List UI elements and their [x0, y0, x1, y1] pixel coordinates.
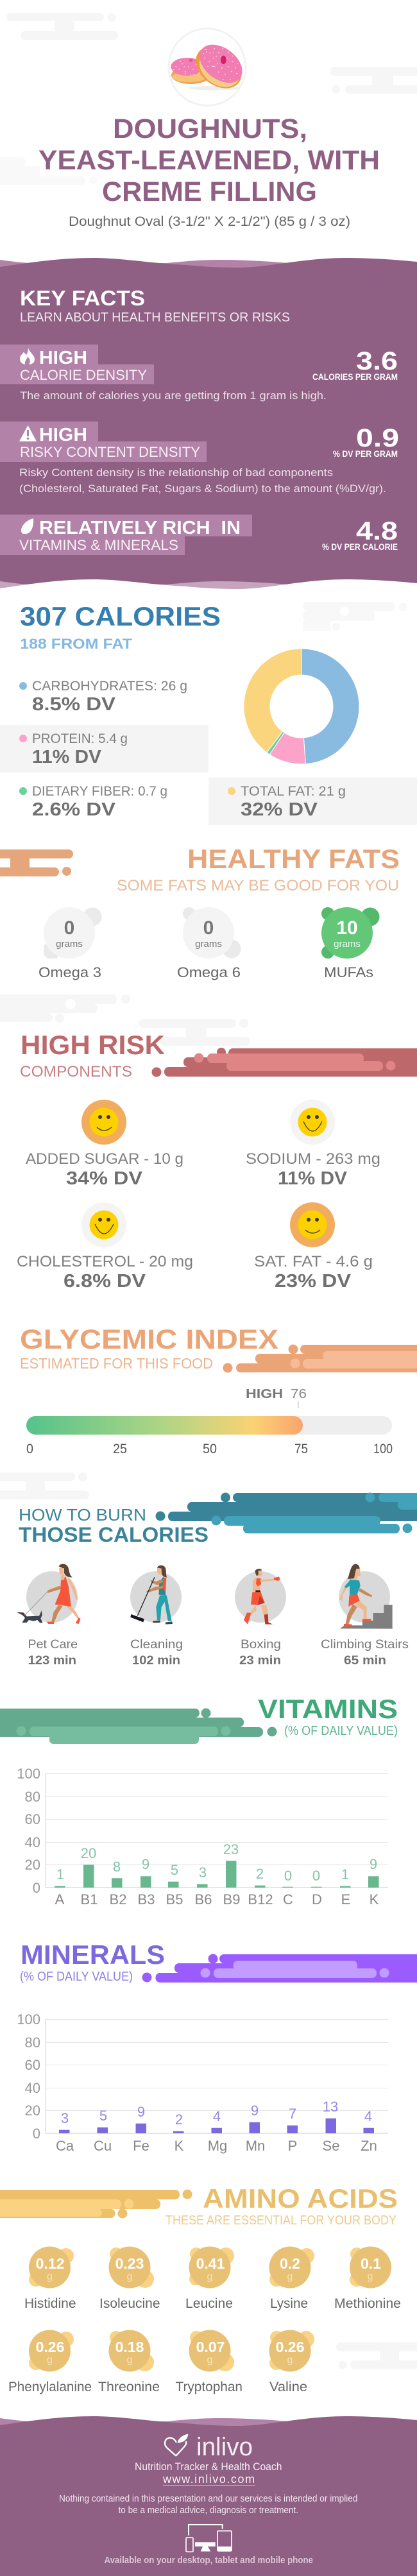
amino: leucine: g: [207, 2271, 212, 2282]
bar chart: vitamins: 9: [370, 1856, 377, 1872]
legend: total fat: 32% DV: [241, 799, 318, 820]
section brush: [0, 849, 73, 876]
risk: cholesterol: 6.8% DV: [64, 1271, 146, 1292]
website link: www.inlivo.com: [162, 2473, 255, 2486]
legend: dietary fiber: 2.6% DV: [32, 799, 116, 820]
section brush: [142, 1954, 417, 1983]
fat: mufas: MUFAs: [324, 964, 373, 980]
title: DOUGHNUTS,: [113, 114, 307, 144]
amino: tryptophan: 0.07: [196, 2339, 225, 2355]
amino: isoleucine: [99, 2247, 160, 2311]
bar chart: vitamins: 1: [341, 1866, 349, 1882]
section brush: [223, 1345, 417, 1373]
panel: healthy fats: [0, 844, 400, 980]
bar chart: vitamins: 60: [25, 1811, 40, 1827]
bar chart: vitamins: 0: [312, 1868, 320, 1884]
bar chart: minerals: 2: [175, 2111, 183, 2128]
amino: valine: 0.26: [276, 2339, 304, 2355]
icon: warning triangle: [19, 425, 37, 441]
heading: key facts: KEY FACTS: [20, 286, 145, 310]
amino: threonine: 0.18: [115, 2339, 144, 2355]
panel: calories: [0, 601, 417, 825]
amino: lysine: Lysine: [270, 2296, 308, 2311]
section brush: [0, 1708, 277, 1744]
risk: sodium: SODIUM - 263 mg: [246, 1150, 380, 1168]
gauge scale: 0: [26, 1442, 33, 1456]
amino: leucine: Leucine: [185, 2296, 233, 2311]
amino: phenylalanine: 0.26: [36, 2339, 64, 2355]
tagline: Nutrition Tracker & Health Coach: [135, 2461, 282, 2473]
bar chart: minerals: 40: [25, 2080, 40, 2096]
bar chart: minerals: 9: [137, 2104, 145, 2120]
panel: footer: [0, 2416, 417, 2576]
bar chart: minerals: Mg: [208, 2138, 227, 2154]
bar chart: vitamins: A: [55, 1891, 65, 1907]
amino: phenylalanine: [8, 2330, 92, 2394]
bar chart: vitamins: 8: [113, 1859, 121, 1875]
gauge scale: [26, 1442, 393, 1456]
heading: healthy fats: HEALTHY FATS: [187, 844, 400, 874]
legend: total fat: [228, 784, 346, 820]
fat: omega 3: Omega 3: [38, 964, 101, 980]
bar chart: vitamins: B5: [166, 1891, 183, 1907]
heading: high risk: HIGH RISK: [21, 1030, 165, 1060]
bar chart: minerals: Ca: [56, 2138, 74, 2154]
activity: climbing stairs: Climbing Stairs: [321, 1638, 409, 1651]
bar chart: minerals: K: [174, 2138, 184, 2154]
fat: omega 6: 0: [203, 917, 214, 939]
amino: tryptophan: Tryptophan: [176, 2380, 243, 2394]
fact: risky content density: RISKY CONTENT DENSITY: [20, 444, 200, 460]
bar chart: vitamins: 0: [284, 1868, 292, 1884]
bar chart: minerals: 4: [213, 2108, 221, 2124]
fact: calorie density: 3.6: [356, 347, 398, 375]
amino: threonine: g: [127, 2355, 132, 2366]
fat: omega 3: grams: [56, 939, 83, 950]
amino: methionine: Methionine: [334, 2296, 401, 2311]
bar chart: vitamins: D: [312, 1891, 322, 1907]
bar chart: vitamins: B1: [81, 1891, 98, 1907]
bar chart: minerals: 20: [25, 2103, 40, 2119]
fact: relatively rich in vitamins and minerals: 4.8: [356, 517, 398, 545]
risk: cholesterol: CHOLESTEROL - 20 mg: [17, 1253, 193, 1270]
bar chart: vitamins: 2: [256, 1866, 264, 1882]
key facts subheading: LEARN ABOUT HEALTH BENEFITS OR RISKS: [20, 311, 290, 325]
amino: methionine: g: [368, 2271, 373, 2282]
legend: dietary fiber: DIETARY FIBER: 0.7 g: [32, 784, 167, 799]
bar chart: minerals: 4: [364, 2108, 372, 2124]
amino: isoleucine: Isoleucine: [99, 2296, 160, 2311]
legend: dietary fiber: [19, 784, 167, 820]
amino: histidine: [24, 2247, 76, 2311]
bar chart: vitamins: 9: [142, 1856, 149, 1872]
bar chart: minerals: 9: [251, 2103, 259, 2119]
bar chart: vitamins: 80: [25, 1789, 40, 1805]
activity: pet care: 123 min: [28, 1654, 76, 1668]
amino: histidine: g: [47, 2271, 53, 2282]
bar chart: vitamins: K: [370, 1891, 379, 1907]
heading: vitamins: VITAMINS: [258, 1694, 398, 1724]
glycemic value label: [246, 1387, 307, 1408]
amino: histidine: 0.12: [36, 2255, 64, 2272]
glycemic subheading: ESTIMATED FOR THIS FOOD: [20, 1355, 213, 1372]
amino: tryptophan: [176, 2330, 243, 2394]
bar chart: vitamins: B12: [248, 1891, 273, 1907]
glycemic gauge bar: [26, 1416, 392, 1435]
icon: flame: [20, 348, 35, 364]
donut chart: [244, 649, 359, 764]
risk: saturated fat: [254, 1202, 373, 1292]
bar chart: vitamins: B9: [223, 1891, 240, 1907]
fact: risky content density: (Cholesterol, Saturated Fat, Sugars & Sodium) to the amount (%DV/gr).: [19, 482, 386, 495]
amino: valine: [269, 2330, 314, 2394]
calories from fat: 188 FROM FAT: [20, 636, 133, 652]
amino: methionine: 0.1: [361, 2255, 381, 2272]
risk: cholesterol: [17, 1202, 193, 1292]
fat: mufas: [321, 907, 380, 980]
bar chart: vitamins: 20: [81, 1845, 96, 1861]
amino: lysine: [269, 2247, 314, 2311]
gauge scale: 100: [373, 1442, 393, 1456]
title: [38, 114, 380, 207]
bar chart: minerals: 7: [289, 2106, 296, 2122]
bar chart: vitamins: B2: [110, 1891, 126, 1907]
fat: mufas: grams: [334, 939, 361, 950]
fact: relatively rich in vitamins and minerals: [0, 515, 398, 555]
amino: lysine: 0.2: [280, 2255, 300, 2272]
fat: omega 6: [177, 907, 241, 980]
amino: tryptophan: g: [207, 2355, 212, 2366]
bar chart: vitamins: 0: [33, 1880, 40, 1896]
gauge scale: 75: [294, 1442, 308, 1456]
activity: boxing: [235, 1569, 286, 1668]
bar chart: minerals: 13: [323, 2099, 338, 2115]
fact: risky content density: % DV PER GRAM: [333, 449, 398, 459]
amino: valine: g: [287, 2355, 293, 2366]
fact: relatively rich in vitamins and minerals: VITAMINS & MINERALS: [19, 537, 178, 553]
bar chart: minerals: 80: [25, 2034, 40, 2051]
heading: minerals: MINERALS: [21, 1940, 165, 1970]
bar chart: vitamins: 23: [223, 1841, 239, 1857]
activity: boxing: Boxing: [241, 1638, 281, 1651]
legend: carbohydrates: CARBOHYDRATES: 26 g: [32, 679, 187, 694]
fact: risky content density: Risky Content density is the relationship of bad components: [19, 466, 333, 479]
fat: omega 6: grams: [195, 939, 222, 950]
heading: calories: 307 CALORIES: [20, 601, 221, 631]
bar chart: vitamins: 3: [199, 1864, 207, 1881]
vitamins subheading: (% OF DAILY VALUE): [284, 1724, 398, 1738]
fat: omega 3: [38, 907, 101, 980]
gauge scale: 50: [203, 1442, 217, 1456]
fact: risky content density: [0, 422, 399, 495]
risk: added sugar: 34% DV: [66, 1168, 143, 1189]
legend: carbohydrates: 8.5% DV: [32, 694, 116, 715]
disclaimer: [59, 2494, 358, 2516]
healthy fats subheading: SOME FATS MAY BE GOOD FOR YOU: [117, 877, 399, 894]
legend: protein: PROTEIN: 5.4 g: [32, 731, 128, 746]
amino: leucine: 0.41: [196, 2255, 225, 2272]
logo: inlivo: [165, 2433, 253, 2461]
bar chart: minerals: 3: [61, 2110, 69, 2126]
bar chart: minerals: Se: [323, 2138, 339, 2154]
bar chart: vitamins: C: [283, 1891, 293, 1907]
activity: climbing stairs: 65 min: [344, 1654, 386, 1668]
availability note: Available on your desktop, tablet and mobile phone: [104, 2555, 313, 2566]
amino: valine: Valine: [269, 2380, 307, 2394]
bar chart: vitamins: 5: [171, 1862, 178, 1878]
bar chart: minerals: 60: [25, 2057, 40, 2073]
bar chart: vitamins: B6: [195, 1891, 212, 1907]
activity: boxing: 23 min: [239, 1654, 281, 1668]
fact: calorie density: The amount of calories you are getting from 1 gram is high.: [20, 389, 327, 402]
amino acids subheading: THESE ARE ESSENTIAL FOR YOUR BODY: [166, 2213, 396, 2228]
high risk subheading: COMPONENTS: [20, 1063, 132, 1080]
bar chart: minerals: P: [288, 2138, 297, 2154]
amino: phenylalanine: Phenylalanine: [8, 2380, 92, 2394]
panel: how to burn those calories: [17, 1492, 417, 1668]
risk: saturated fat: 23% DV: [275, 1271, 352, 1292]
fact: calorie density: CALORIE DENSITY: [20, 367, 147, 383]
fat: omega 3: 0: [64, 917, 74, 939]
panel: key facts: [0, 258, 417, 593]
legend: protein: [19, 731, 128, 767]
legend: carbohydrates: [19, 679, 187, 715]
section brush: [155, 1492, 417, 1533]
fact: risky content density: 0.9: [356, 424, 399, 452]
fact: calorie density: HIGH: [39, 348, 87, 368]
heading: glycemic index: GLYCEMIC INDEX: [20, 1324, 278, 1355]
bar chart: minerals: 100: [17, 2011, 40, 2027]
disclaimer: Nothing contained in this presentation and our services is intended or implied: [59, 2494, 358, 2504]
amino: phenylalanine: g: [47, 2355, 53, 2366]
activity: cleaning: Cleaning: [130, 1638, 183, 1651]
glycemic value label: HIGH: [246, 1387, 283, 1401]
bar chart: minerals: [17, 2011, 388, 2154]
bar chart: minerals: Cu: [94, 2138, 112, 2154]
fact: relatively rich in vitamins and minerals: RELATIVELY RICH IN: [39, 518, 241, 538]
heading: how to burn: HOW TO BURN: [19, 1505, 146, 1524]
amino: histidine: Histidine: [24, 2296, 76, 2311]
bar chart: vitamins: 1: [56, 1866, 64, 1882]
legend: total fat: TOTAL FAT: 21 g: [241, 784, 346, 799]
fact: risky content density: HIGH: [39, 425, 87, 445]
panel: high risk components: [17, 1030, 417, 1292]
risk: saturated fat: SAT. FAT - 4.6 g: [254, 1253, 373, 1270]
amino: threonine: Threonine: [98, 2380, 160, 2394]
amino: lysine: g: [287, 2271, 293, 2282]
activity: pet care: Pet Care: [28, 1638, 78, 1651]
panel: amino acids: [0, 2183, 401, 2394]
title: CREME FILLING: [102, 176, 317, 207]
bar chart: vitamins: [17, 1766, 388, 1907]
fact: calorie density: [0, 345, 398, 402]
activity: cleaning: [130, 1565, 183, 1668]
icon: doughnuts photo: [169, 28, 250, 105]
panel: vitamins: [0, 1694, 398, 1907]
bar chart: minerals: Zn: [361, 2138, 377, 2154]
risk: added sugar: ADDED SUGAR - 10 g: [26, 1150, 183, 1168]
heading: amino acids: AMINO ACIDS: [203, 2183, 398, 2213]
amino: isoleucine: g: [127, 2271, 132, 2282]
amino: methionine: [334, 2247, 401, 2311]
fat: mufas: 10: [336, 917, 358, 939]
amino: leucine: [185, 2247, 234, 2311]
panel: glycemic index: [20, 1324, 417, 1456]
bar chart: vitamins: B3: [138, 1891, 155, 1907]
bar chart: minerals: Fe: [133, 2138, 149, 2154]
section brush: [151, 1048, 417, 1077]
fat: omega 6: Omega 6: [177, 964, 241, 980]
risk: added sugar: [26, 1100, 183, 1189]
fact: calorie density: CALORIES PER GRAM: [312, 372, 398, 382]
legend: protein: 11% DV: [32, 747, 102, 767]
heading: those calories: THOSE CALORIES: [19, 1523, 208, 1546]
amino: threonine: [98, 2330, 160, 2394]
icon: leaf: [21, 518, 33, 534]
activity: cleaning: 102 min: [132, 1654, 180, 1668]
panel: minerals: [17, 1940, 417, 2154]
activity: climbing stairs: [321, 1564, 409, 1668]
amino: isoleucine: 0.23: [115, 2255, 144, 2272]
risk: sodium: 11% DV: [278, 1168, 348, 1189]
section brush: [0, 2189, 192, 2219]
minerals subheading: (% OF DAILY VALUE): [20, 1970, 133, 1984]
logo: inlivo: inlivo: [196, 2433, 253, 2461]
serving size subtitle: Doughnut Oval (3-1/2" X 2-1/2") (85 g / 3 oz): [69, 214, 350, 229]
risk: sodium: [246, 1100, 380, 1189]
bar chart: vitamins: 40: [25, 1834, 40, 1850]
activity: pet care: [17, 1564, 81, 1668]
icon: devices: [186, 2525, 232, 2552]
bar chart: minerals: 5: [99, 2108, 107, 2124]
bar chart: minerals: Mn: [246, 2138, 265, 2154]
bar chart: vitamins: 20: [25, 1857, 40, 1873]
bar chart: vitamins: E: [341, 1891, 350, 1907]
title: YEAST-LEAVENED, WITH: [38, 145, 380, 176]
gauge scale: 25: [113, 1442, 127, 1456]
bar chart: minerals: 0: [33, 2126, 40, 2142]
bar chart: vitamins: 100: [17, 1766, 40, 1782]
fact: relatively rich in vitamins and minerals: % DV PER CALORIE: [322, 542, 398, 552]
glycemic value label: 76: [291, 1387, 307, 1401]
disclaimer: to be a medical advice, diagnosis or treatment.: [118, 2505, 298, 2516]
